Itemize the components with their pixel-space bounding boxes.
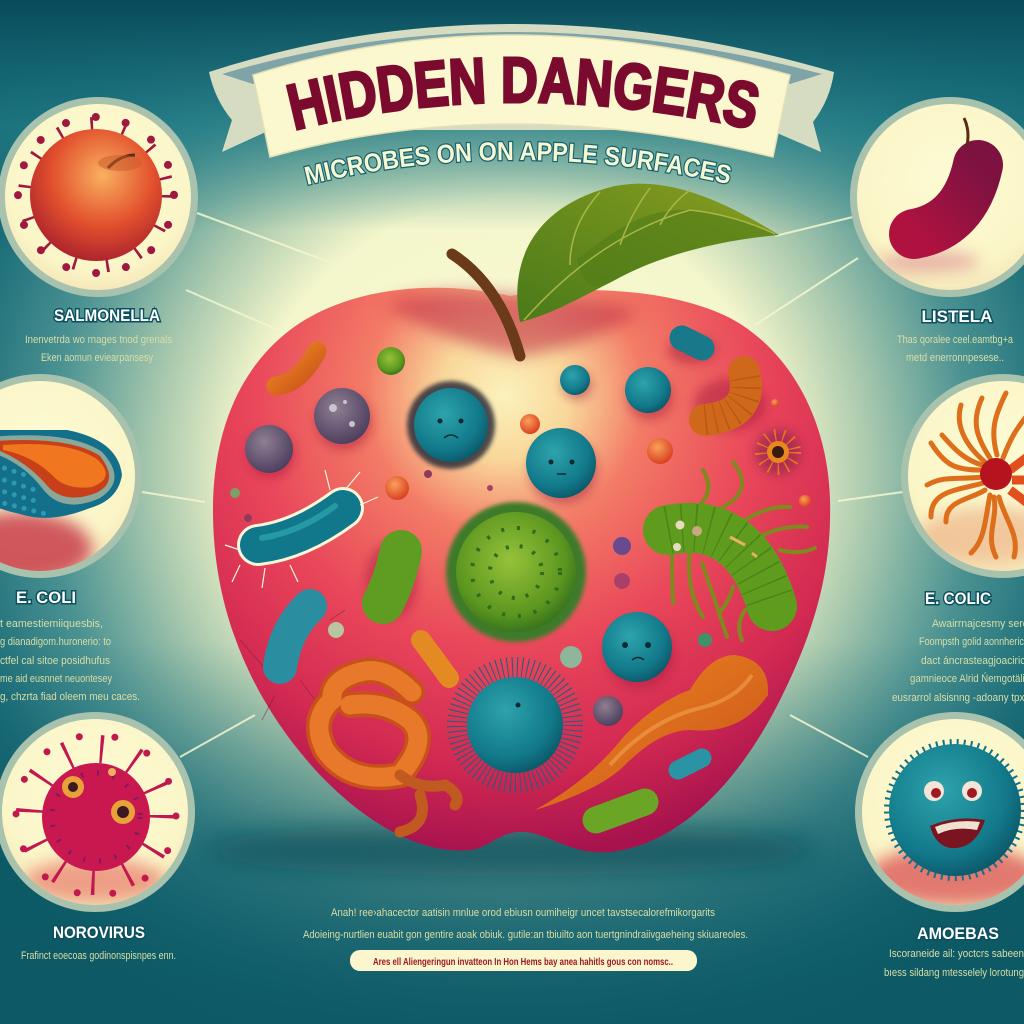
icon: amoeba	[870, 742, 1024, 905]
icon: tentacled microbe	[920, 393, 1024, 563]
text: salmonella: Eken aomun eviearpansesy	[41, 352, 153, 364]
text: e. coli	[0, 618, 140, 703]
heading: e. coli: E. COLI	[16, 588, 76, 607]
icon: red bean	[880, 118, 980, 272]
soft red shadows under microbes	[247, 336, 766, 688]
microbe: big green ball	[446, 502, 586, 642]
microbe: teal face ball	[407, 381, 495, 469]
panel: listeria	[850, 97, 1024, 297]
apple	[213, 184, 830, 852]
heading: norovirus: NOROVIRUS	[53, 923, 145, 942]
microbe: teal bacillus	[225, 470, 378, 588]
microbe: orange capsule	[421, 640, 449, 678]
title ribbon	[209, 24, 834, 186]
text: norovirus: Frafinct eoecoas godinonspisnpes enn.	[21, 950, 176, 962]
callout pill: Ares ell Aliengeringun invatteon In Hon Hems bay anea hahitls gous con nomsc..	[373, 956, 673, 968]
apple body	[213, 288, 830, 852]
text: e. coli: me aid eusnnet neuontesey	[0, 673, 112, 685]
microbe: green caterpillar	[668, 462, 815, 640]
text: e. coli: g dianadigom.huronerio: to	[0, 636, 111, 648]
leaf	[517, 184, 779, 322]
panel: e. colic right	[901, 374, 1024, 578]
panel: norovirus	[0, 712, 195, 912]
microbe: orange star	[755, 429, 801, 475]
ribbon tails	[209, 24, 834, 152]
text: e. coli: ctfel cal sitoe posidhufus	[0, 655, 110, 667]
callout pill	[350, 950, 697, 971]
text: e. coli: t eamestiemiiquesbis,	[0, 618, 103, 630]
microbe: grey ball lower	[245, 425, 293, 473]
icon: e. coli cell	[0, 430, 122, 584]
text: salmonella: Inenvetrda wo rnages tnod grenals	[25, 334, 172, 346]
stem	[452, 254, 520, 356]
icon: norovirus	[16, 735, 176, 902]
microbe: orange worm left	[319, 671, 457, 832]
text: e. coli: g, chzrta fiad oleem meu caces.	[0, 691, 140, 703]
panel: salmonella	[0, 97, 198, 297]
title text: HIDDEN DANGERS	[286, 56, 759, 131]
heading: listela: LISTELA	[922, 307, 992, 326]
microbe: small green ball	[377, 347, 405, 375]
ribbon banner	[253, 35, 790, 157]
heading: amoebas: AMOEBAS	[917, 924, 999, 943]
microbe: blue bean	[240, 606, 345, 720]
microbe: orange larva	[705, 372, 746, 420]
apple shadow	[200, 824, 820, 876]
panel: amoebas	[855, 712, 1024, 912]
bottom text block: Adoieing-nurtlien euabit gon gentire aoak obiuk. gutile:an tbiuilto aon tuertgnindraiivgaeheing skiuareoles.	[303, 929, 748, 941]
subtitle text: MICROBES ON ON APPLE SURFACES	[303, 140, 732, 186]
bottom text block: Anah! ree›ahacector aatisin mnlue orod ebiusn oumiheigr uncet tavstsecalorefmikorgarits	[331, 907, 715, 919]
microbe: green bean	[383, 551, 401, 603]
bottom text block	[303, 907, 748, 941]
microbe: spiky teal ball	[457, 667, 573, 783]
text: e. colic	[892, 618, 1024, 704]
icon: salmonella apple	[18, 117, 174, 273]
microbe: grey ball upper	[314, 388, 370, 444]
microbe: teal capsule	[682, 338, 702, 348]
text: amoebas	[884, 948, 1024, 979]
text: salmonella	[25, 334, 172, 364]
microbe: teal face ball center	[526, 428, 596, 498]
microbe: orange worm top left	[276, 351, 317, 386]
droplets	[230, 399, 811, 668]
text: listela: metd enerronnpesese..	[906, 352, 1004, 364]
microbe: teal small balls	[560, 365, 671, 413]
text: listela	[897, 334, 1014, 364]
heading: salmonella: SALMONELLA	[54, 306, 160, 325]
panel: e. coli left	[0, 374, 142, 584]
heading: e. colic: E. COLIC	[925, 589, 991, 608]
microbe: orange worm right	[535, 655, 768, 810]
microbe: small capsules and purple ball	[593, 696, 702, 820]
top dip	[385, 292, 640, 356]
connector lines	[142, 213, 903, 757]
microbe: teal face ball lower	[602, 612, 672, 682]
